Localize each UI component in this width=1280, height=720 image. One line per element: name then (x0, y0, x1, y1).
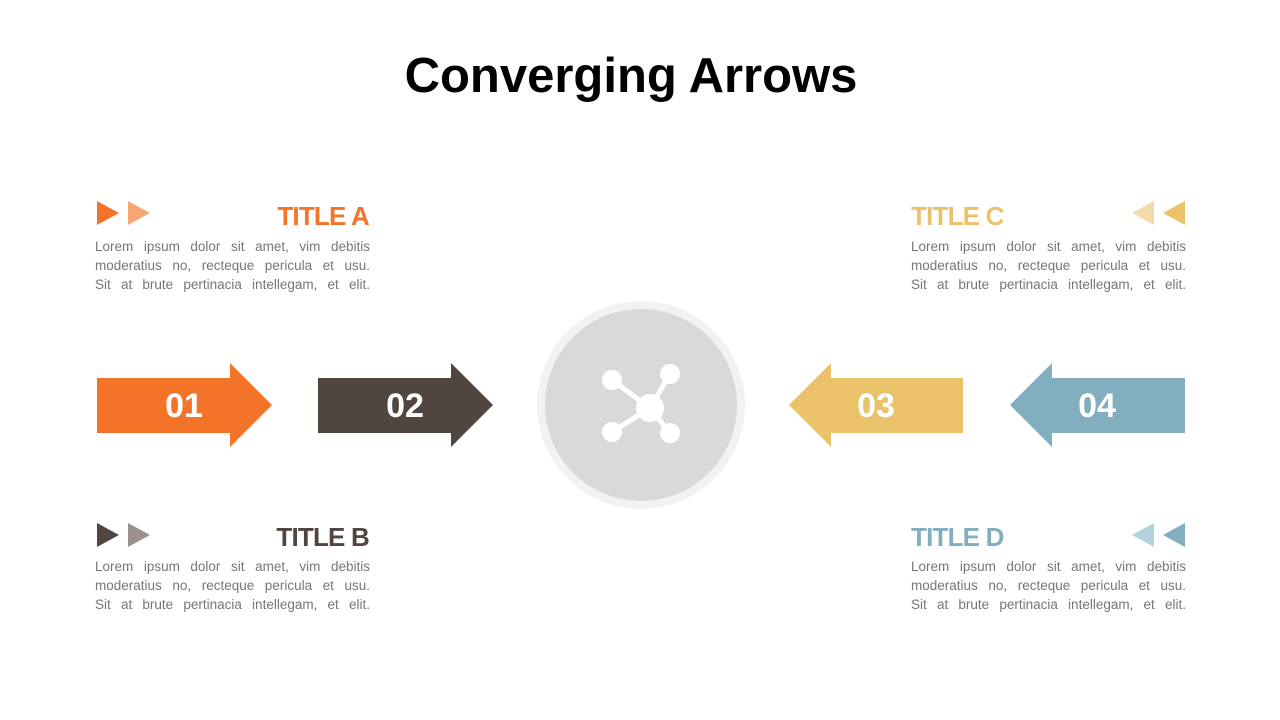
text D: Lorem ipsum dolor sit amet, vim debitis (911, 559, 1186, 574)
arrow 04: 04 (1078, 387, 1116, 425)
text D: Sit at brute pertinacia intellegam, et elit. (911, 597, 1186, 612)
heading A: TITLE A (277, 201, 369, 231)
text D: moderatius no, recteque pericula et usu. (911, 578, 1186, 593)
text D (911, 559, 1186, 612)
panel: title C (911, 201, 1186, 292)
text A: moderatius no, recteque pericula et usu. (95, 258, 370, 273)
heading C: TITLE C (911, 201, 1004, 231)
center circle with network icon (537, 301, 745, 509)
icon: double triangles D (1132, 523, 1185, 547)
heading D: TITLE D (911, 522, 1004, 552)
text B: moderatius no, recteque pericula et usu. (95, 578, 370, 593)
arrow 03: 03 (857, 387, 895, 425)
panel: title B (95, 522, 370, 612)
arrow 01: 01 (165, 387, 203, 425)
arrow 04 (1010, 363, 1185, 447)
arrow 02: 02 (386, 387, 424, 425)
text C (911, 239, 1186, 292)
heading B: TITLE B (276, 522, 369, 552)
text C: Sit at brute pertinacia intellegam, et elit. (911, 277, 1186, 292)
text B: Sit at brute pertinacia intellegam, et elit. (95, 597, 370, 612)
icon: double triangles A (97, 201, 150, 225)
text C: moderatius no, recteque pericula et usu. (911, 258, 1186, 273)
text A: Sit at brute pertinacia intellegam, et elit. (95, 277, 370, 292)
panel: title A (95, 201, 370, 292)
arrow 03 (789, 363, 963, 447)
arrow 01 (97, 363, 272, 447)
panel: title D (911, 522, 1186, 612)
arrow 02 (318, 363, 493, 447)
text A: Lorem ipsum dolor sit amet, vim debitis (95, 239, 370, 254)
icon: double triangles C (1132, 201, 1185, 225)
text B (95, 559, 370, 612)
text C: Lorem ipsum dolor sit amet, vim debitis (911, 239, 1186, 254)
icon: double triangles B (97, 523, 150, 547)
text A (95, 239, 370, 292)
text B: Lorem ipsum dolor sit amet, vim debitis (95, 559, 370, 574)
title: Converging Arrows (405, 49, 857, 103)
